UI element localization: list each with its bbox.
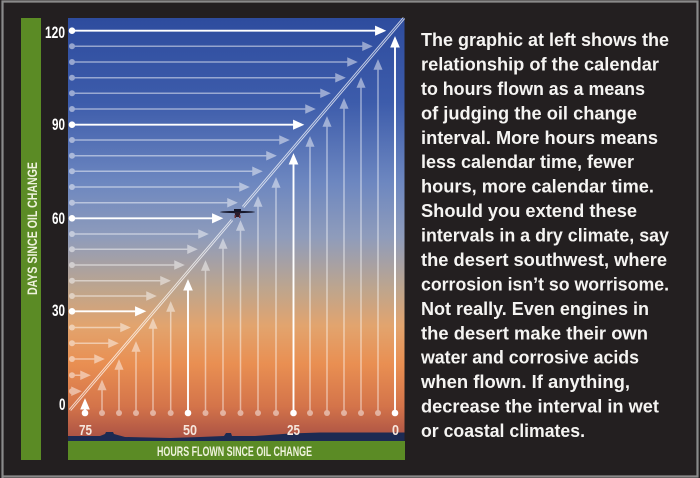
bold horizontal arrows at 120, 90, 60 and 30 days [69,27,384,315]
explanatory text block: Should you extend these [421,201,637,221]
hours axis labels: 0 [392,422,399,439]
icon: airplane [220,209,255,218]
explanatory text block: when flown. If anything, [420,372,630,392]
explanatory text block: interval. More hours means [421,128,658,148]
days axis labels: 120 [45,23,65,42]
faded horizontal arrows [69,43,371,395]
hours axis labels: 50 [183,422,197,439]
explanatory text block: Not really. Even engines in [421,299,649,319]
days axis labels: 90 [52,115,65,134]
explanatory text block: or coastal climates. [421,421,585,441]
horizontal axis title bar: HOURS FLOWN SINCE OIL CHANGE [157,443,312,459]
explanatory text block: The graphic at left shows the [421,30,669,50]
vertical axis title bar [21,18,41,460]
days axis labels [45,23,66,414]
sky gradient chart background [68,18,404,441]
horizon skyline [68,432,404,441]
explanatory text block: hours, more calendar time. [421,177,654,197]
days axis labels: 60 [52,209,65,228]
vertical axis title bar: DAYS SINCE OIL CHANGE [24,162,40,295]
explanatory text block [420,30,669,441]
bold vertical arrows at 75, 50, 25 and 0 hours [82,38,398,416]
hours axis labels: 75 [79,422,92,439]
explanatory text block: less calendar time, fewer [421,152,634,172]
diagonal relationship line [69,17,405,411]
days axis labels: 30 [52,301,65,320]
horizontal axis title bar [68,441,405,460]
explanatory text block: the desert southwest, where [421,250,667,270]
explanatory text block: to hours flown as a means [421,79,645,99]
explanatory text block: the desert make their own [421,323,648,343]
hours axis labels [79,422,399,439]
hours axis labels: 25 [287,422,300,439]
explanatory text block: intervals in a dry climate, say [421,226,669,246]
explanatory text block: corrosion isn’t so worrisome. [421,274,669,294]
explanatory text block: relationship of the calendar [421,54,659,74]
explanatory text block: water and corrosive acids [420,348,639,368]
faded vertical arrows [99,61,381,416]
days axis labels: 0 [59,395,66,414]
explanatory text block: decrease the interval in wet [421,397,659,417]
explanatory text block: of judging the oil change [421,103,637,123]
